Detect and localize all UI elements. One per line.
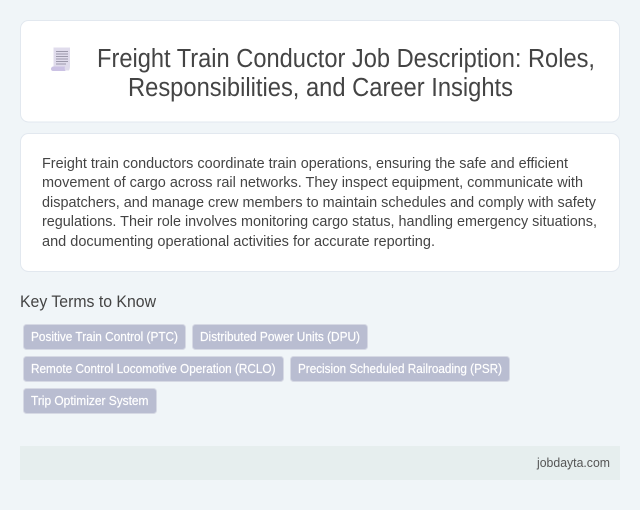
description text: regulations. Their role involves monitoring cargo status, handling emergency situations, bbox=[42, 213, 597, 230]
tag: PSR bbox=[290, 356, 510, 382]
title: Freight Train Conductor Job Description: Roles, bbox=[97, 45, 595, 73]
tag: RCLO: Remote Control Locomotive Operation (RCLO) bbox=[31, 362, 276, 376]
panel: description bbox=[20, 134, 620, 272]
tag: RCLO bbox=[24, 356, 284, 382]
description text bbox=[42, 155, 597, 250]
tag: PTC: Positive Train Control (PTC) bbox=[31, 330, 178, 344]
description text: dispatchers, and manage crew members to maintain schedules and comply with safety bbox=[42, 194, 596, 211]
icon: document bbox=[51, 48, 70, 71]
tag: PTC bbox=[24, 324, 186, 350]
tag: DPU bbox=[192, 324, 368, 350]
panel: header bbox=[20, 20, 620, 122]
tag: PSR: Precision Scheduled Railroading (PSR) bbox=[298, 362, 502, 376]
description text: movement of cargo across rail networks. They inspect equipment, communicate with bbox=[42, 174, 583, 191]
tag: trip optimizer bbox=[24, 388, 156, 414]
footer bbox=[20, 446, 620, 480]
description text: Freight train conductors coordinate train operations, ensuring the safe and efficient bbox=[42, 155, 569, 172]
description text: and documenting operational activities for accurate reporting. bbox=[42, 233, 435, 250]
title: Responsibilities, and Career Insights bbox=[128, 74, 513, 102]
tag: trip optimizer: Trip Optimizer System bbox=[31, 394, 148, 408]
tag: DPU: Distributed Power Units (DPU) bbox=[200, 330, 360, 344]
title bbox=[97, 45, 595, 102]
heading: key terms: Key Terms to Know bbox=[20, 293, 156, 311]
footer: jobdayta.com bbox=[536, 456, 610, 470]
